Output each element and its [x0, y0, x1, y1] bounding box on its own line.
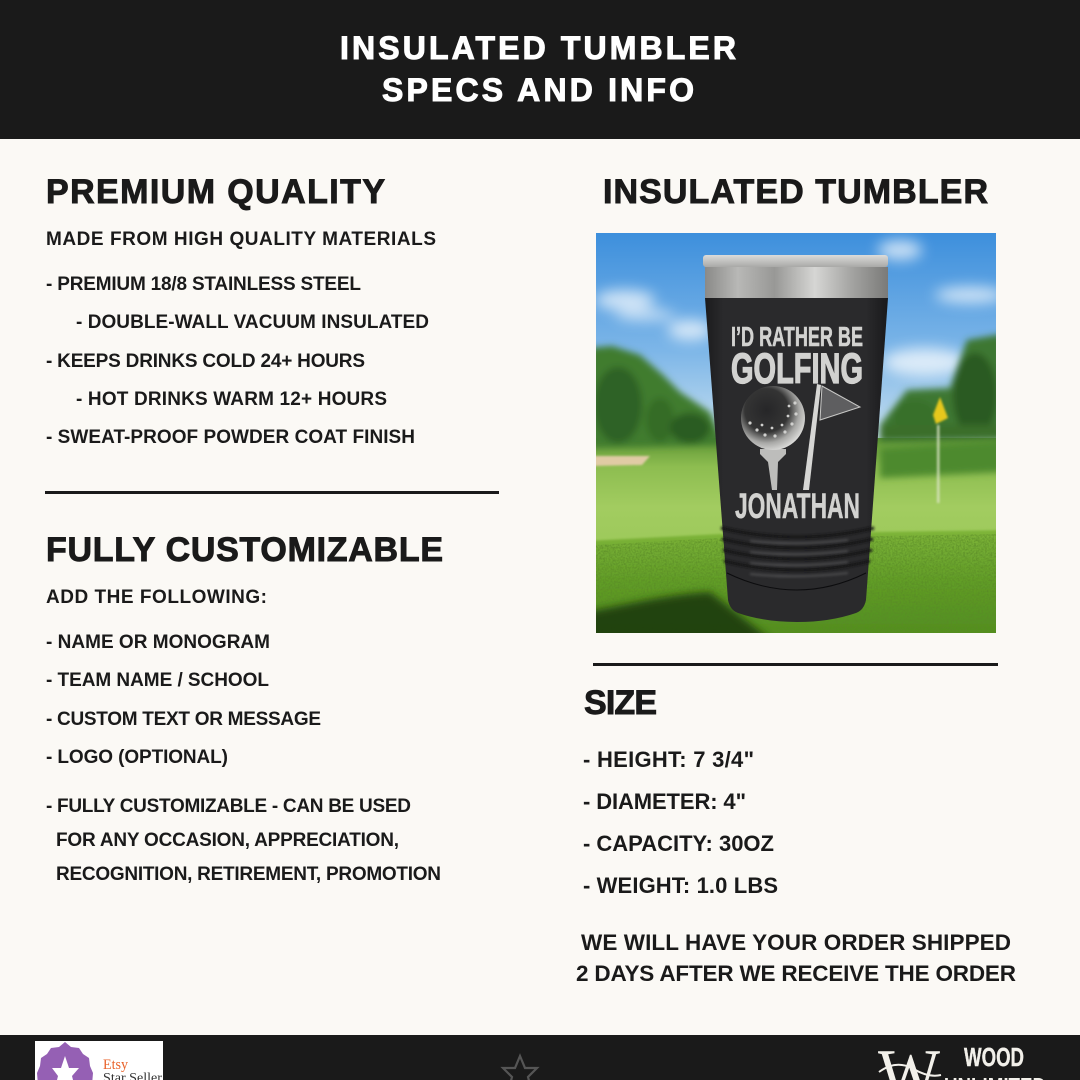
text block: premium features: - KEEPS DRINKS COLD 24+ HOURS [46, 351, 365, 372]
text block: customization options: - TEAM NAME / SCHOOL [46, 670, 269, 691]
text block: dimensions [583, 747, 778, 898]
panel: fully customizable [46, 531, 443, 885]
fairway [596, 438, 996, 553]
icon: purple rosette [37, 1042, 93, 1080]
sand bunker [590, 456, 650, 466]
header banner [0, 0, 1080, 139]
text block: customization options: - CUSTOM TEXT OR MESSAGE [46, 709, 321, 730]
darker fairway slope [880, 440, 1002, 478]
icon: star outline [503, 1056, 537, 1080]
engraving: golf ball on tee [741, 386, 805, 490]
base seam [727, 573, 866, 590]
text block: premium features: MADE FROM HIGH QUALITY MATERIALS [46, 229, 436, 250]
text block: premium features: - HOT DRINKS WARM 12+ HOURS [76, 389, 387, 410]
clouds [595, 240, 1005, 376]
ridges [721, 528, 874, 570]
ridge highlights [750, 540, 848, 576]
tumbler body [705, 298, 888, 622]
text block: premium features: - SWEAT-PROOF POWDER COAT FINISH [46, 427, 415, 448]
etsy star seller badge: Etsy [103, 1057, 128, 1073]
heading: fully customizable: FULLY CUSTOMIZABLE [46, 531, 443, 569]
shipping note: WE WILL HAVE YOUR ORDER SHIPPED [581, 930, 1011, 955]
flag pin [933, 397, 948, 503]
tumbler [703, 255, 888, 622]
text block: dimensions: - DIAMETER: 4" [583, 789, 746, 814]
title: SPECS AND INFO [382, 72, 694, 108]
text block: customization options: ADD THE FOLLOWING: [46, 587, 267, 608]
text block: customization options: - FULLY CUSTOMIZABLE - CAN BE USED [46, 796, 411, 817]
logo: wood unlimited: WOOD [964, 1042, 1024, 1072]
text block: premium features: - PREMIUM 18/8 STAINLESS STEEL [46, 274, 361, 295]
text block: dimensions: - WEIGHT: 1.0 LBS [583, 873, 778, 898]
steel band [705, 267, 888, 298]
foreground grass [596, 530, 996, 633]
heading: insulated tumbler: INSULATED TUMBLER [603, 173, 988, 211]
text block: premium features [46, 229, 436, 448]
lid [703, 255, 888, 267]
title [340, 30, 736, 108]
text block: dimensions: - CAPACITY: 30OZ [583, 831, 774, 856]
text block: dimensions: - HEIGHT: 7 3/4" [583, 747, 754, 772]
title: INSULATED TUMBLER [340, 30, 736, 66]
footer bar [0, 1035, 1080, 1080]
trees [590, 334, 1002, 448]
text block: customization options [46, 587, 441, 885]
shipping note [576, 930, 1016, 986]
shipping note: 2 DAYS AFTER WE RECEIVE THE ORDER [576, 961, 1016, 986]
engraved slogan [732, 326, 863, 384]
heading: premium quality: PREMIUM QUALITY [46, 173, 385, 211]
heading: size: SIZE [584, 684, 657, 722]
grass shadow [596, 588, 770, 633]
logo: wood unlimited [878, 1048, 1044, 1080]
text block: customization options: FOR ANY OCCASION, APPRECIATION, [56, 830, 399, 851]
engraving: flag [803, 384, 860, 490]
text block: premium features: - DOUBLE-WALL VACUUM INSULATED [76, 312, 429, 333]
text block: customization options: - NAME OR MONOGRAM [46, 632, 270, 653]
engraved slogan: I’D RATHER BE [731, 321, 863, 352]
etsy star seller badge [35, 1041, 163, 1080]
text block: customization options: - LOGO (OPTIONAL) [46, 747, 228, 768]
panel: size [583, 684, 778, 898]
text block: customization options: RECOGNITION, RETIREMENT, PROMOTION [56, 864, 441, 885]
engraved slogan: GOLFING [731, 345, 863, 393]
grass texture [596, 530, 996, 633]
panel: premium quality [46, 173, 436, 448]
engraved name: JONATHAN [735, 487, 860, 526]
product photo: tumbler on golf course [586, 233, 1006, 643]
